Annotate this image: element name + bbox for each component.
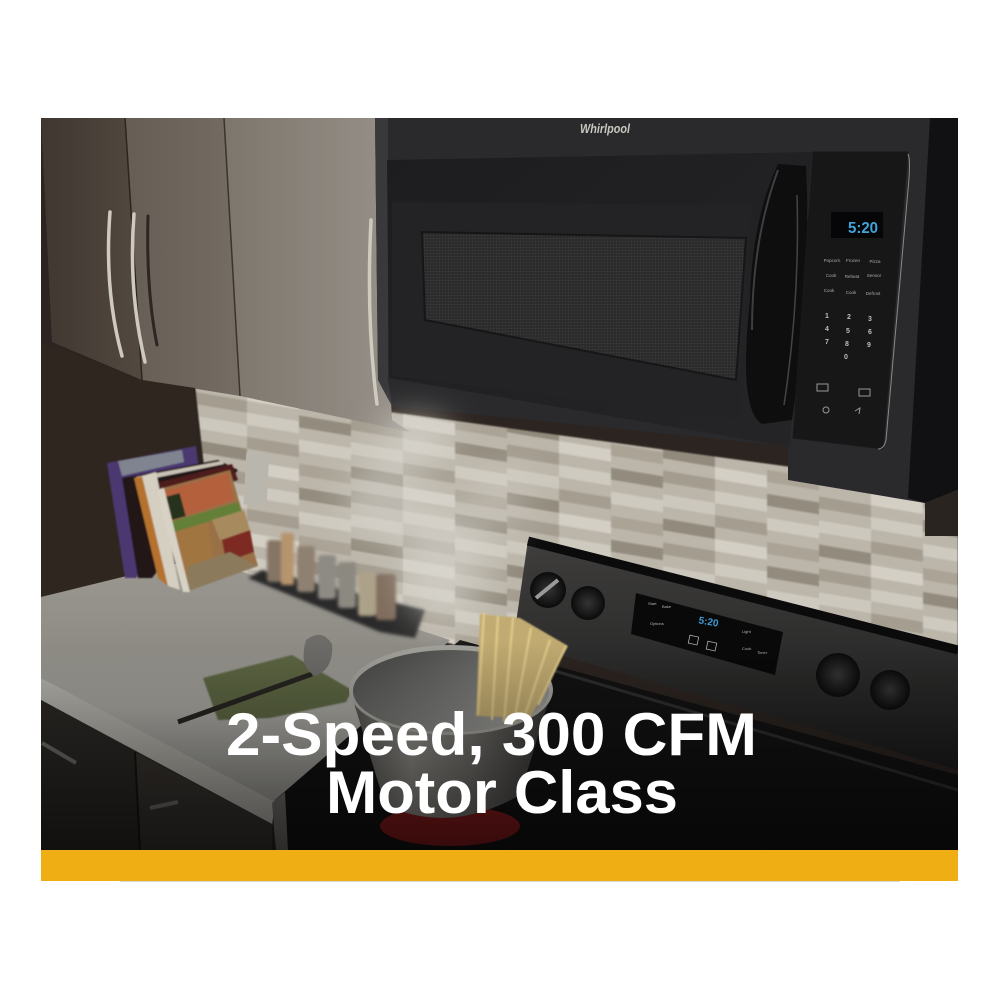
upper cabinets <box>41 118 410 432</box>
start and stop buttons <box>817 384 870 414</box>
range backguard: Light <box>742 629 752 634</box>
spice jars <box>267 533 396 620</box>
keypad labels: Cook <box>826 273 837 278</box>
photo: kitchen scene with over-the-range microwave <box>41 118 958 851</box>
spice tray <box>248 570 425 638</box>
range backguard: Options <box>650 621 664 626</box>
microwave <box>375 118 958 503</box>
cookbooks <box>107 446 258 592</box>
number pad: 6 <box>868 329 872 336</box>
number pad: 2 <box>847 314 851 321</box>
logo: Whirlpool <box>580 121 630 136</box>
range backguard: Timer <box>757 650 768 655</box>
window mesh <box>422 232 746 380</box>
number pad <box>825 313 872 361</box>
keypad labels: Defrost <box>866 291 881 296</box>
range display panel <box>631 593 783 675</box>
range backguard: Bake <box>662 604 672 609</box>
lower cabinets <box>41 700 272 851</box>
keypad labels: Frozen <box>846 258 860 263</box>
countertop <box>41 558 450 810</box>
lower handles <box>42 743 178 808</box>
keypad labels: Reheat <box>845 274 860 279</box>
control panel <box>793 152 910 449</box>
title: 2-Speed, 300 CFM <box>226 701 757 768</box>
serving spoon <box>178 635 332 722</box>
keypad labels: Popcorn <box>824 258 841 263</box>
number pad: 7 <box>825 339 829 346</box>
keypad labels: Pizza <box>869 259 881 264</box>
microwave body <box>375 118 958 503</box>
range backguard: Cook <box>742 646 751 651</box>
range knobs <box>530 572 566 608</box>
control panel: 5:20 <box>848 220 878 237</box>
number pad: 3 <box>868 316 872 323</box>
cooktop steel edge <box>272 792 288 851</box>
right cabinet end <box>925 490 958 536</box>
keypad labels: Sensor <box>867 273 882 278</box>
keypad labels: Cook <box>846 290 857 295</box>
yellow band <box>41 850 958 881</box>
range backguard <box>515 540 958 790</box>
side wall below cabinets <box>142 380 195 393</box>
title: Motor Class <box>326 759 678 826</box>
spaghetti <box>476 612 568 722</box>
number pad: 4 <box>825 326 829 333</box>
number pad: 5 <box>846 328 850 335</box>
range backguard: Start <box>648 601 657 606</box>
wall outlet <box>244 452 269 506</box>
steam plume <box>345 420 528 625</box>
bottom shading <box>41 640 958 851</box>
range cooktop <box>275 640 958 851</box>
number pad: 1 <box>825 313 829 320</box>
boiling pot <box>349 645 553 818</box>
range backguard: 5:20 <box>698 615 720 630</box>
photo sliver under band <box>120 881 900 882</box>
number pad: 9 <box>867 342 871 349</box>
wall background <box>41 118 958 851</box>
keypad labels: Cook <box>824 288 835 293</box>
counter front edge <box>41 678 275 826</box>
burner glow <box>380 806 520 846</box>
cover photo book <box>163 469 258 579</box>
keypad labels <box>824 258 882 296</box>
microwave door <box>387 152 812 406</box>
number pad: 8 <box>845 341 849 348</box>
infographic canvas <box>41 118 958 882</box>
number pad: 0 <box>844 354 848 361</box>
towel <box>203 655 352 720</box>
time display <box>831 212 883 238</box>
backsplash tiles <box>195 385 958 660</box>
cabinet handles <box>108 212 377 404</box>
door handle <box>746 164 807 424</box>
title <box>226 701 757 826</box>
